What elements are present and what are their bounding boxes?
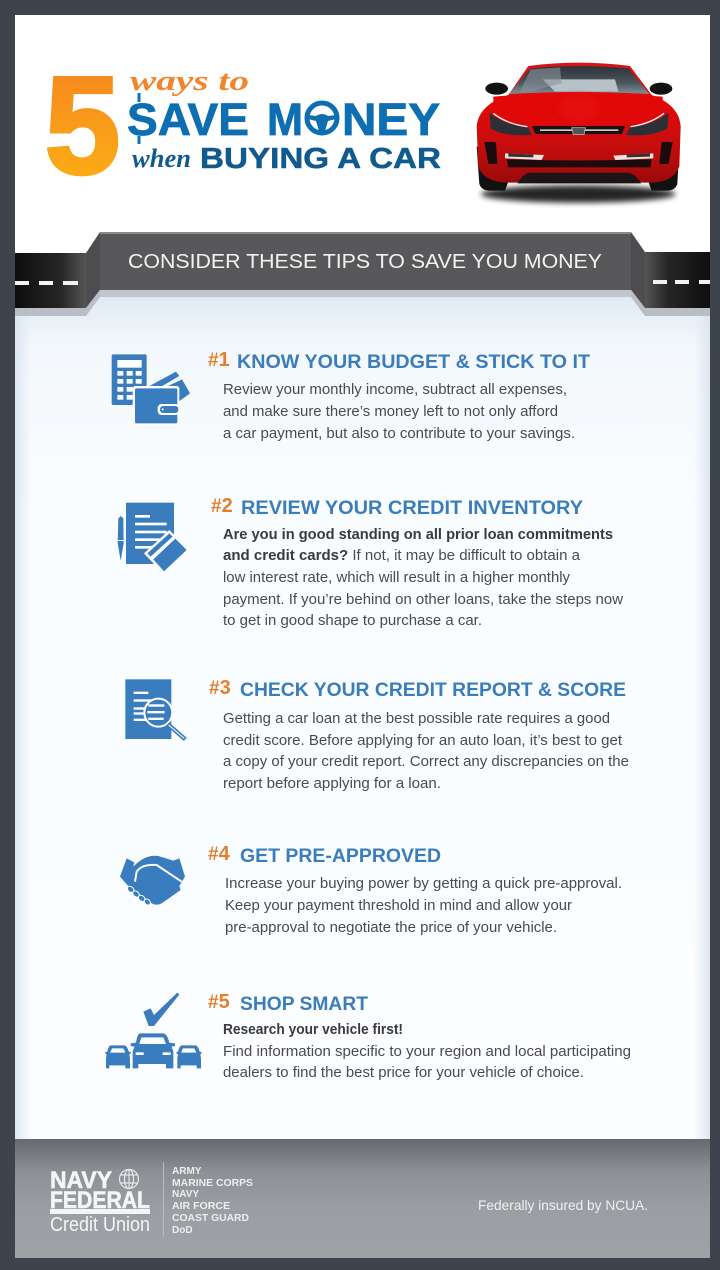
road right bbox=[631, 232, 710, 316]
icon: cars and check mark bbox=[105, 993, 202, 1068]
tip 5 bbox=[105, 991, 631, 1081]
road banner bbox=[15, 232, 710, 316]
body 2 bbox=[223, 527, 624, 629]
tip 2 bbox=[117, 495, 624, 629]
icon: calculator and wallet bbox=[112, 354, 190, 425]
body 2: to get in good shape to purchase a car. bbox=[223, 613, 482, 629]
save money: NEY bbox=[342, 94, 440, 145]
heading 1: #1 bbox=[208, 349, 230, 371]
body 5: Find information specific to your region and local participating bbox=[223, 1044, 631, 1060]
body 3: report before applying for a loan. bbox=[223, 776, 441, 792]
body 2: Are you in good standing on all prior loan commitments bbox=[223, 527, 613, 543]
big number five: 5 bbox=[45, 49, 120, 203]
icon: report and magnifier bbox=[125, 679, 185, 739]
tips content panel bbox=[15, 297, 710, 1140]
header panel bbox=[15, 15, 710, 305]
body 4: pre-approval to negotiate the price of your vehicle. bbox=[225, 920, 557, 936]
body 2: low interest rate, which will result in a higher monthly bbox=[223, 570, 571, 586]
heading 5: #5 bbox=[208, 991, 230, 1013]
when script: when bbox=[132, 144, 191, 173]
logo: Navy Federal Credit Union bbox=[50, 1167, 150, 1236]
body 4: Keep your payment threshold in mind and allow your bbox=[225, 898, 572, 914]
tip 4: GET PRE-APPROVED bbox=[240, 846, 441, 867]
tip 4 bbox=[120, 843, 622, 936]
icon: handshake bbox=[120, 856, 185, 906]
branches list: NAVY bbox=[172, 1189, 199, 1200]
heading 4: #4 bbox=[208, 843, 231, 865]
body 4: Increase your buying power by getting a quick pre-approval. bbox=[225, 876, 622, 892]
icon: document and card bbox=[117, 503, 189, 575]
branches list: COAST GUARD bbox=[172, 1213, 249, 1224]
body 1 bbox=[223, 382, 575, 442]
body 2: and credit cards? If not, it may be difficult to obtain a bbox=[223, 548, 580, 564]
footer bbox=[15, 1139, 710, 1258]
logo: Navy Federal Credit Union: FEDERAL bbox=[50, 1187, 150, 1214]
save money: SAVE bbox=[127, 94, 249, 145]
logo: Navy Federal Credit Union: NAVY bbox=[50, 1167, 112, 1194]
body 3 bbox=[223, 711, 629, 792]
banner plate bbox=[100, 232, 631, 290]
red car illustration bbox=[477, 63, 681, 203]
tip 3 bbox=[125, 677, 629, 792]
tip 5: SHOP SMART bbox=[240, 994, 368, 1015]
icon: globe bbox=[120, 1170, 138, 1188]
tip 2: REVIEW YOUR CREDIT INVENTORY bbox=[241, 498, 583, 519]
branches list: AIR FORCE bbox=[172, 1201, 230, 1212]
logo: Navy Federal Credit Union: Credit Union bbox=[50, 1214, 150, 1236]
NCUA note: Federally insured by NCUA. bbox=[478, 1197, 648, 1213]
branches list bbox=[172, 1166, 253, 1236]
save money: M bbox=[267, 94, 303, 145]
body 4 bbox=[225, 876, 622, 936]
branches list: DoD bbox=[172, 1225, 193, 1236]
save money bbox=[127, 93, 440, 145]
body 5: Research your vehicle first! bbox=[223, 1022, 403, 1038]
heading 3: #3 bbox=[209, 677, 231, 699]
logo divider bbox=[163, 1162, 164, 1237]
tip 1: KNOW YOUR BUDGET & STICK TO IT bbox=[237, 352, 590, 373]
body 5 bbox=[223, 1022, 631, 1081]
buying a car: BUYING A CAR bbox=[200, 143, 441, 175]
tip 3: CHECK YOUR CREDIT REPORT & SCORE bbox=[240, 680, 626, 701]
body 3: credit score. Before applying for an auto loan, it’s best to get bbox=[223, 733, 622, 749]
body 2: payment. If you’re behind on other loans, take the steps now bbox=[223, 592, 624, 608]
road left bbox=[15, 232, 100, 316]
banner heading: CONSIDER THESE TIPS TO SAVE YOU MONEY bbox=[128, 251, 602, 273]
body 3: a copy of your credit report. Correct any discrepancies on the bbox=[223, 754, 629, 770]
ways to script: ways to bbox=[130, 65, 249, 97]
body 1: a car payment, but also to contribute to your savings. bbox=[223, 426, 575, 442]
branches list: MARINE CORPS bbox=[172, 1178, 253, 1189]
body 5: dealers to find the best price for your vehicle of choice. bbox=[223, 1065, 584, 1081]
body 3: Getting a car loan at the best possible rate requires a good bbox=[223, 711, 610, 727]
tip 1 bbox=[112, 349, 590, 442]
body 1: and make sure there’s money left to not only afford bbox=[223, 404, 558, 420]
title bbox=[45, 49, 441, 203]
heading 2: #2 bbox=[211, 495, 233, 517]
body 1: Review your monthly income, subtract all expenses, bbox=[223, 382, 567, 398]
branches list: ARMY bbox=[172, 1166, 202, 1177]
